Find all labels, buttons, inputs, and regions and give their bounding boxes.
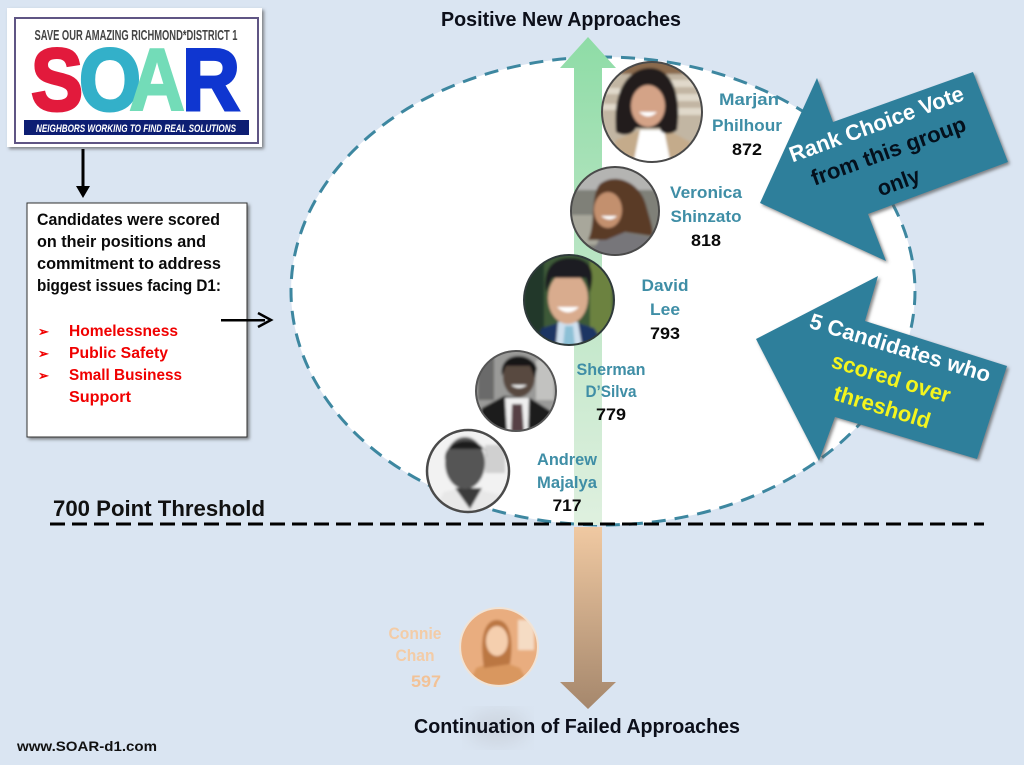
candidate group ellipse <box>291 57 915 525</box>
logo letters: R <box>182 30 240 129</box>
scoring description: biggest issues facing D1: <box>37 277 221 295</box>
callout text: rank choice vote: Rank Choice Vote <box>786 81 967 167</box>
portrait ring 4 <box>476 351 556 431</box>
candidate label: Veronica Shinzato: 818 <box>691 231 721 250</box>
issues list: Small Business <box>69 367 182 384</box>
candidate label: Sherman D'Silva <box>576 360 646 424</box>
callout arrow: rank choice vote <box>760 72 1008 261</box>
candidate label: Connie Chan <box>388 624 442 691</box>
callout text: five candidates: 5 Candidates who <box>807 308 994 387</box>
portrait: Veronica Shinzato <box>570 166 660 256</box>
logo letters: O <box>79 30 141 129</box>
heading: continuation of failed approaches: Continuation of Failed Approaches <box>414 716 740 738</box>
issues list <box>38 323 182 406</box>
scoring description: on their positions and <box>37 233 206 251</box>
portrait: David Lee <box>525 256 613 344</box>
candidate label: Andrew Majalya: 717 <box>552 496 582 515</box>
candidate label: Marjan Philhour: 872 <box>732 140 762 159</box>
candidate label: Marjan Philhour: Marjan <box>719 90 779 109</box>
logo letters: A <box>129 30 185 129</box>
issues list: ➢ <box>38 368 50 383</box>
SOAR logo <box>7 8 262 147</box>
portrait ring 3 <box>524 255 614 345</box>
logo tagline top: SAVE OUR AMAZING RICHMOND*DISTRICT 1 <box>34 27 237 44</box>
threshold label: 700 Point Threshold <box>53 496 265 521</box>
candidate label: Veronica Shinzato <box>670 183 743 250</box>
candidate label: Sherman D'Silva: Sherman <box>576 360 646 379</box>
callout text: rank choice vote: from this group <box>808 111 969 191</box>
portrait: Sherman D'Silva <box>475 350 557 432</box>
issues list: ➢ <box>38 324 50 339</box>
candidate label: Veronica Shinzato: Veronica <box>670 183 743 202</box>
callout text: rank choice vote: only <box>873 162 924 201</box>
faint smudge behind heading <box>468 710 528 746</box>
portrait ring 1 <box>602 62 702 162</box>
heading: positive new approaches: Positive New Approaches <box>441 9 681 31</box>
callout text: five candidates: threshold <box>831 380 934 433</box>
candidate label: Connie Chan: Chan <box>396 646 434 665</box>
candidate label: David Lee: Lee <box>650 300 680 319</box>
callout text: five candidates: scored over <box>829 348 954 408</box>
candidate label: Andrew Majalya: Majalya <box>537 473 598 492</box>
arrow: logo to text box <box>76 149 90 198</box>
arrow: positive direction up <box>560 37 616 525</box>
scoring description <box>37 211 221 295</box>
issues list: Public Safety <box>69 345 168 362</box>
portrait: Marjan Philhour <box>603 63 701 158</box>
issues list: Support <box>69 389 132 406</box>
issues list: ➢ <box>38 346 50 361</box>
candidate label: David Lee <box>642 276 688 343</box>
candidate label: Connie Chan: 597 <box>411 672 441 691</box>
candidate label: Andrew Majalya <box>537 450 598 515</box>
issues list: Homelessness <box>69 323 178 340</box>
candidate label: Connie Chan: Connie <box>388 624 442 643</box>
candidate label: David Lee: David <box>642 276 688 295</box>
candidate label: David Lee: 793 <box>650 324 680 343</box>
candidate label: Sherman D'Silva: 779 <box>596 405 626 424</box>
portrait: Andrew Majalya <box>428 432 508 510</box>
portrait: Connie Chan <box>459 607 539 687</box>
scoring description: Candidates were scored <box>37 211 220 229</box>
scoring text box <box>27 203 247 437</box>
website: www.SOAR-d1.com <box>16 738 157 754</box>
threshold dashed line <box>50 522 984 526</box>
candidate label: Sherman D'Silva: D’Silva <box>586 382 637 401</box>
logo letters <box>31 30 240 129</box>
callout arrow: five candidates <box>756 276 1007 461</box>
arrow: text box to ellipse <box>221 313 271 327</box>
portrait ring 2 <box>571 167 659 255</box>
logo tagline bottom: NEIGHBORS WORKING TO FIND REAL SOLUTIONS <box>36 123 236 135</box>
candidate label: Marjan Philhour: Philhour <box>712 116 782 135</box>
arrow: failed direction down <box>560 527 616 709</box>
logo letters: S <box>31 30 83 129</box>
candidate label: Andrew Majalya: Andrew <box>537 450 598 469</box>
candidate label: Veronica Shinzato: Shinzato <box>670 207 742 226</box>
portrait ring 5 <box>427 430 509 512</box>
candidate label: Marjan Philhour <box>712 90 782 159</box>
callout text: five candidates <box>807 308 994 433</box>
scoring description: commitment to address <box>37 255 221 273</box>
